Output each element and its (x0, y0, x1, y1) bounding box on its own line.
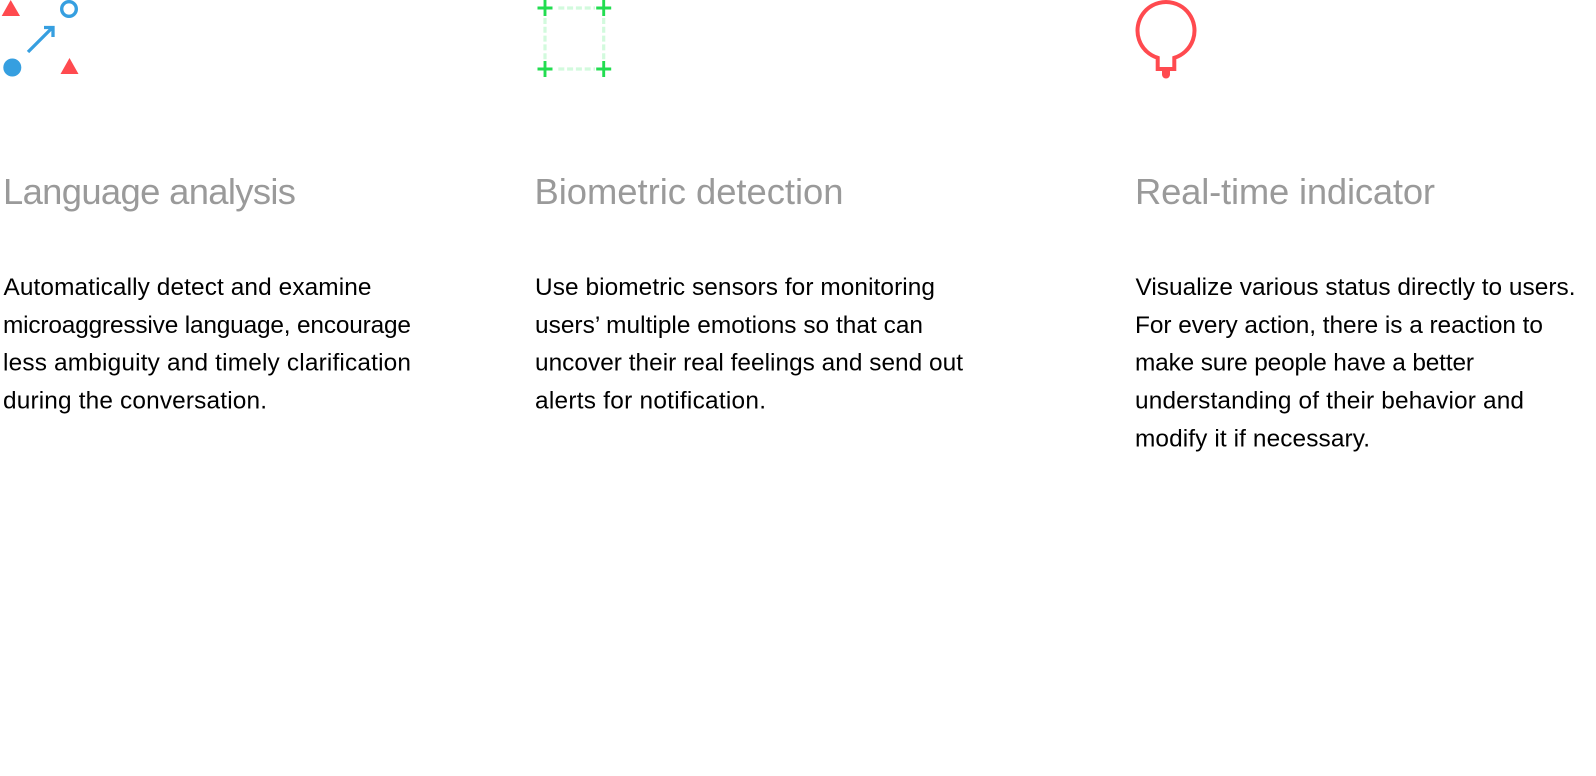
panel: biometric detection (534, 0, 963, 415)
text block: biometric detection description: users’ multiple emotions so that can (535, 312, 923, 339)
text block: real-time indicator description (1135, 274, 1576, 452)
text block: real-time indicator description: modify it if necessary. (1135, 426, 1370, 452)
icon: dashed square with corner crosses (538, 0, 611, 77)
text block: real-time indicator description: Visualize various status directly to users. (1136, 274, 1576, 301)
icon: shapes and arrow (2, 0, 79, 76)
text block: language analysis description (3, 274, 411, 415)
text block: biometric detection description: alerts for notification. (535, 388, 766, 415)
text block: real-time indicator description: make sure people have a better (1135, 350, 1474, 377)
text block: language analysis description: microaggressive language, encourage (3, 312, 411, 339)
heading: language analysis: Language analysis (3, 171, 296, 212)
text block: language analysis description: Automatically detect and examine (4, 274, 372, 301)
icon: indicator bulb (1138, 2, 1194, 79)
text block: biometric detection description (535, 274, 963, 415)
panel: real-time indicator (1135, 2, 1576, 453)
panel: language analysis (2, 0, 411, 415)
text block: real-time indicator description: understanding of their behavior and (1135, 388, 1524, 415)
heading: biometric detection: Biometric detection (534, 171, 844, 212)
text block: biometric detection description: uncover their real feelings and send out (535, 350, 963, 377)
heading: real-time indicator: Real-time indicator (1135, 171, 1435, 212)
text block: biometric detection description: Use biometric sensors for monitoring (535, 274, 935, 301)
text block: real-time indicator description: For every action, there is a reaction to (1135, 312, 1543, 339)
text block: language analysis description: less ambiguity and timely clarification (3, 350, 411, 377)
text block: language analysis description: during the conversation. (3, 388, 267, 415)
